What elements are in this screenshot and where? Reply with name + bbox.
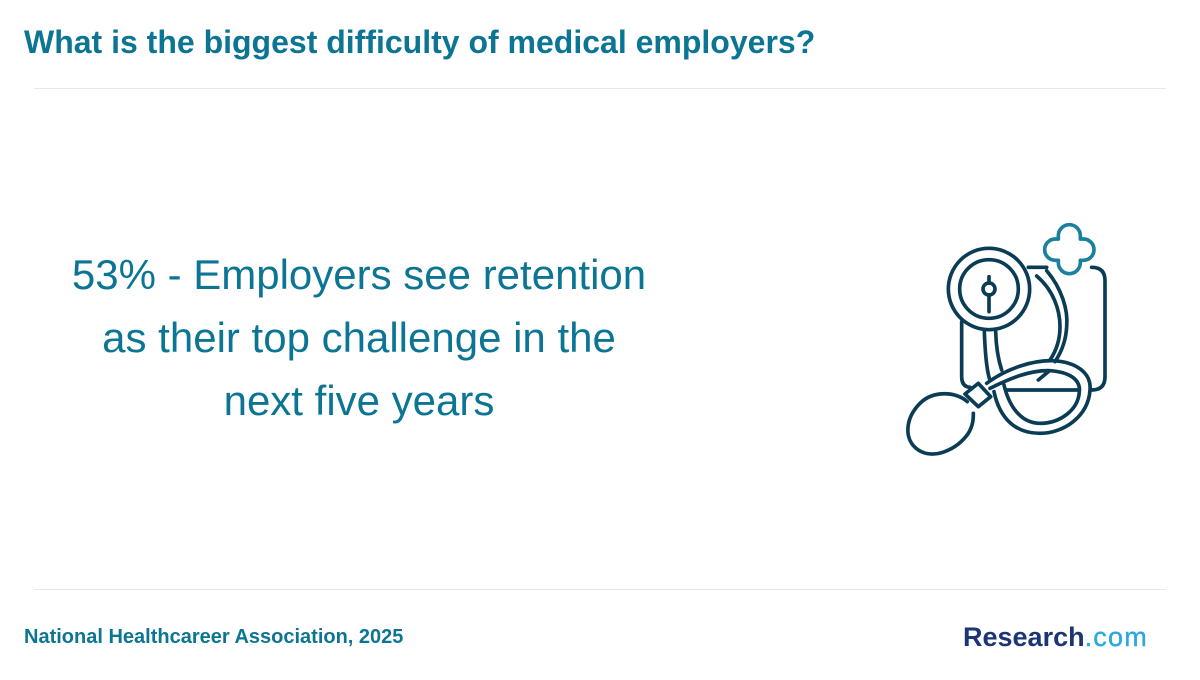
main statistic text: next five years — [224, 377, 494, 424]
title: What is the biggest difficulty of medical employers? — [24, 24, 815, 60]
main statistic text: as their top challenge in the — [102, 314, 616, 361]
icon: blood pressure monitor — [906, 222, 1107, 456]
source: National Healthcareer Association, 2025 — [24, 626, 403, 648]
logo: Research.com — [963, 622, 1148, 652]
main statistic text — [72, 251, 646, 424]
main statistic text: 53% - Employers see retention — [72, 251, 646, 298]
